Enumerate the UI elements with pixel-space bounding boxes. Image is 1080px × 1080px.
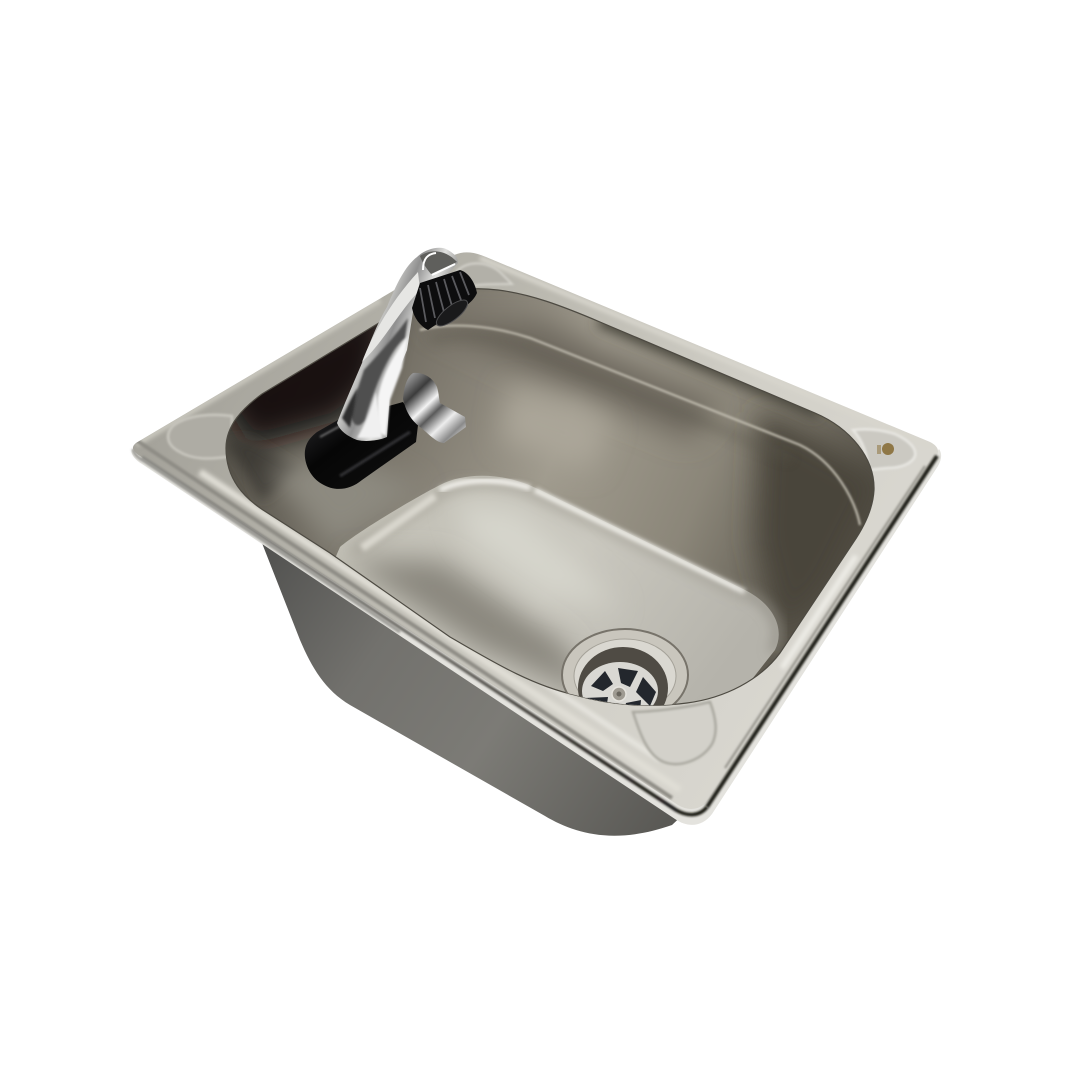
corner recess: bottom [633, 702, 716, 764]
sink exterior wall [260, 538, 720, 836]
lower-left dark edge line [142, 457, 707, 815]
faucet chrome spout [337, 248, 458, 441]
corner recess: right with logo [853, 429, 915, 470]
right dark edge line [707, 456, 937, 807]
corner recess: left [168, 415, 232, 459]
drain [561, 628, 689, 706]
drain strainer [582, 662, 658, 706]
basin floor [330, 476, 779, 720]
faucet lever handle [403, 373, 466, 443]
faucet black aerator head [412, 270, 477, 330]
basin opening [215, 289, 885, 720]
inner wall shading [228, 324, 378, 453]
faucet black base [305, 402, 418, 489]
rim outer lip [131, 449, 941, 825]
rim top surface [133, 252, 938, 815]
faucet [305, 248, 477, 489]
corner recess: top [455, 263, 512, 288]
icon: logo stamp [877, 443, 894, 455]
product photo: stainless steel sink with faucet [130, 248, 941, 836]
floor ridge highlights [352, 483, 745, 596]
floor shading [345, 560, 600, 700]
